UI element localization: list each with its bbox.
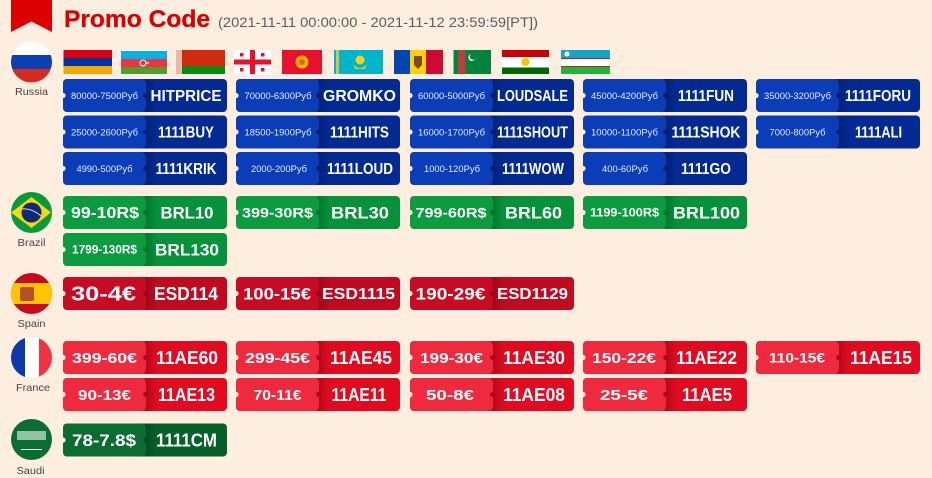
coupon: 11AE60: [60, 341, 227, 374]
flag: Armenia: [64, 50, 112, 74]
icon: Brazil flag: [11, 192, 52, 233]
coupon: 11AE60: 11AE60: [156, 348, 218, 368]
coupon: BRL60: 799-60R$: [416, 204, 487, 220]
coupon: 11AE22: 11AE22: [676, 348, 737, 368]
icon: Saudi Arabia flag: [11, 419, 52, 460]
label: Spain: Spain: [18, 318, 46, 330]
coupon: BRL130: BRL130: [155, 240, 219, 260]
coupon: ESD114: ESD114: [154, 284, 218, 304]
coupon: 1111SHOUT: 1111SHOUT: [497, 124, 568, 142]
coupon: BRL100: BRL100: [673, 204, 740, 222]
coupon: 11AE22: 150-22€: [592, 350, 657, 367]
coupon: 1111FUN: [580, 79, 747, 112]
panel: Russia: [11, 41, 920, 185]
coupon: 1111KRIK: 1111KRIK: [156, 161, 217, 178]
coupon: GROMKO: 70000-6300Руб: [244, 91, 312, 102]
panel: Saudi Arabia: [11, 419, 227, 478]
coupon: BRL10: BRL10: [160, 204, 214, 222]
coupon: 1111BUY: 1111BUY: [158, 124, 214, 142]
coupon: BRL30: BRL30: [331, 204, 389, 222]
coupon: 1111ALI: 7000-800Руб: [770, 128, 826, 138]
coupon: 11AE60: 399-60€: [72, 350, 138, 367]
coupon: 11AE5: 25-5€: [600, 387, 649, 404]
coupon: 1111CM: 1111CM: [156, 430, 217, 450]
coupon: 11AE45: 11AE45: [330, 348, 392, 368]
icon: Spain flag: [11, 273, 52, 314]
label: Brazil: Brazil: [18, 237, 46, 249]
coupon: 1111FORU: 35000-3200Руб: [764, 91, 832, 102]
coupon: 11AE45: 299-45€: [245, 350, 311, 367]
coupon: 1111LOUD: 2000-200Руб: [251, 164, 308, 175]
icon: France flag: [11, 337, 52, 378]
coupon: HITPRICE: 80000-7500Руб: [71, 91, 139, 102]
flag: Belarus: [176, 50, 225, 74]
label: Russia: Russia: [15, 86, 48, 98]
flag: Kyrgyzstan: [282, 50, 322, 74]
flag: Turkmenistan: [454, 50, 491, 74]
flag: Azerbaijan: [121, 51, 167, 74]
coupon: 1111HITS: 1111HITS: [330, 124, 389, 142]
coupon: ESD1129: [407, 277, 574, 310]
coupon: 1111FORU: 1111FORU: [845, 88, 911, 105]
coupon: BRL60: BRL60: [505, 204, 562, 222]
coupon: ESD1115: ESD1115: [322, 286, 395, 303]
coupon: 11AE15: [753, 341, 920, 374]
coupon: 1111LOUD: 1111LOUD: [327, 161, 393, 178]
coupon: LOUDSALE: [407, 79, 574, 112]
coupon: 11AE08: 50-8€: [426, 387, 475, 404]
coupon: 11AE15: 11AE15: [850, 348, 912, 368]
coupon: 11AE30: [407, 341, 574, 374]
panel: France: [11, 337, 920, 411]
coupon: ESD114: 30-4€: [71, 284, 136, 306]
coupon: 1111GO: [580, 152, 747, 185]
coupon: 1111WOW: [407, 152, 574, 185]
coupon: 1111HITS: 18500-1900Руб: [244, 128, 312, 138]
coupon: 1111SHOUT: 16000-1700Руб: [418, 128, 486, 138]
flag row: CIS countries: [64, 50, 610, 74]
coupon: 11AE08: [407, 378, 574, 411]
coupon: 11AE13: 90-13€: [78, 387, 132, 404]
coupon: BRL30: [233, 196, 400, 229]
coupon: 1111GO: 1111GO: [681, 161, 731, 178]
flag: Kazakhstan: [334, 50, 383, 74]
coupon: 1111SHOK: 1111SHOK: [672, 124, 741, 142]
coupon: 1111CM: 78-7.8$: [72, 431, 137, 450]
coupon: 11AE11: [233, 378, 400, 411]
coupon: LOUDSALE: 60000-5000Руб: [418, 91, 486, 102]
coupon: BRL130: [60, 233, 227, 266]
coupon: 1111ALI: 1111ALI: [855, 124, 902, 142]
icon: Russia flag: [11, 41, 52, 83]
coupon: 11AE5: 11AE5: [682, 385, 732, 405]
coupon: 11AE22: [580, 341, 747, 374]
title: Promo Code: [64, 6, 210, 33]
coupon: 11AE15: 110-15€: [769, 350, 825, 366]
coupon: 1111FUN: 1111FUN: [678, 88, 734, 105]
coupon: BRL10: 99-10R$: [71, 205, 139, 222]
coupon: 11AE30: 11AE30: [503, 348, 565, 368]
coupon: 1111BUY: [60, 116, 227, 148]
coupon: 1111GO: 400-60Руб: [602, 164, 649, 175]
coupon: 1111HITS: [233, 116, 400, 148]
label: Saudi Arabia: Saudi: [16, 465, 44, 477]
flag: Tajikistan: [502, 50, 549, 74]
coupon: BRL100: [580, 196, 747, 229]
coupon: 11AE11: 70-11€: [254, 387, 302, 404]
label: France: France: [16, 382, 50, 394]
coupon: 11AE30: 199-30€: [420, 350, 484, 367]
coupon: 1111WOW: 1111WOW: [502, 161, 565, 178]
date range: (2021-11-11 00:00:00 - 2021-11-12 23:59:59[PT]): [218, 14, 538, 30]
coupon: 11AE13: 11AE13: [158, 385, 215, 405]
coupon: GROMKO: [233, 79, 400, 112]
coupon: 1111FORU: [753, 79, 920, 112]
coupon: HITPRICE: HITPRICE: [150, 88, 222, 105]
coupon: ESD114: [60, 277, 227, 310]
coupon: BRL100: 1199-100R$: [590, 206, 659, 220]
panel: Brazil: [11, 192, 747, 266]
coupon: HITPRICE: [60, 79, 227, 112]
coupon: ESD1129: ESD1129: [497, 286, 568, 303]
coupon: 1111SHOUT: [407, 116, 574, 148]
coupon: 11AE5: [580, 378, 747, 411]
coupon: 1111ALI: [753, 116, 920, 148]
coupon: LOUDSALE: LOUDSALE: [497, 88, 568, 105]
coupon: 1111BUY: 25000-2600Руб: [71, 128, 139, 138]
coupon: ESD1115: [233, 277, 400, 310]
coupon: 11AE11: 11AE11: [332, 385, 386, 405]
coupon: BRL60: [407, 196, 574, 229]
coupon: 1111SHOK: [580, 116, 747, 148]
coupon: 1111LOUD: [233, 152, 400, 185]
coupon: GROMKO: GROMKO: [323, 88, 396, 105]
coupon: 1111WOW: 1000-120Руб: [424, 164, 481, 175]
coupon: 1111FUN: 45000-4200Руб: [591, 91, 659, 102]
coupon: 11AE13: [60, 378, 227, 411]
icon: bookmark ribbon: [11, 0, 52, 32]
coupon: BRL10: [60, 196, 227, 229]
coupon: 1111SHOK: 10000-1100Руб: [591, 128, 659, 138]
flag: Moldova: [394, 50, 443, 74]
coupon: 11AE45: [233, 341, 400, 374]
coupon: ESD1115: 100-15€: [243, 284, 312, 304]
flag: Georgia: [234, 50, 271, 74]
flag: Uzbekistan: [561, 50, 610, 74]
panel: Spain: [11, 273, 574, 330]
coupon: ESD1129: 190-29€: [416, 284, 486, 304]
coupon: BRL130: 1799-130R$: [72, 244, 138, 256]
coupon: 1111CM: [60, 424, 227, 456]
coupon: 1111KRIK: [60, 152, 227, 185]
coupon: BRL30: 399-30R$: [242, 204, 313, 220]
coupon: 11AE08: 11AE08: [503, 385, 565, 405]
coupon: 1111KRIK: 4990-500Руб: [76, 164, 133, 175]
